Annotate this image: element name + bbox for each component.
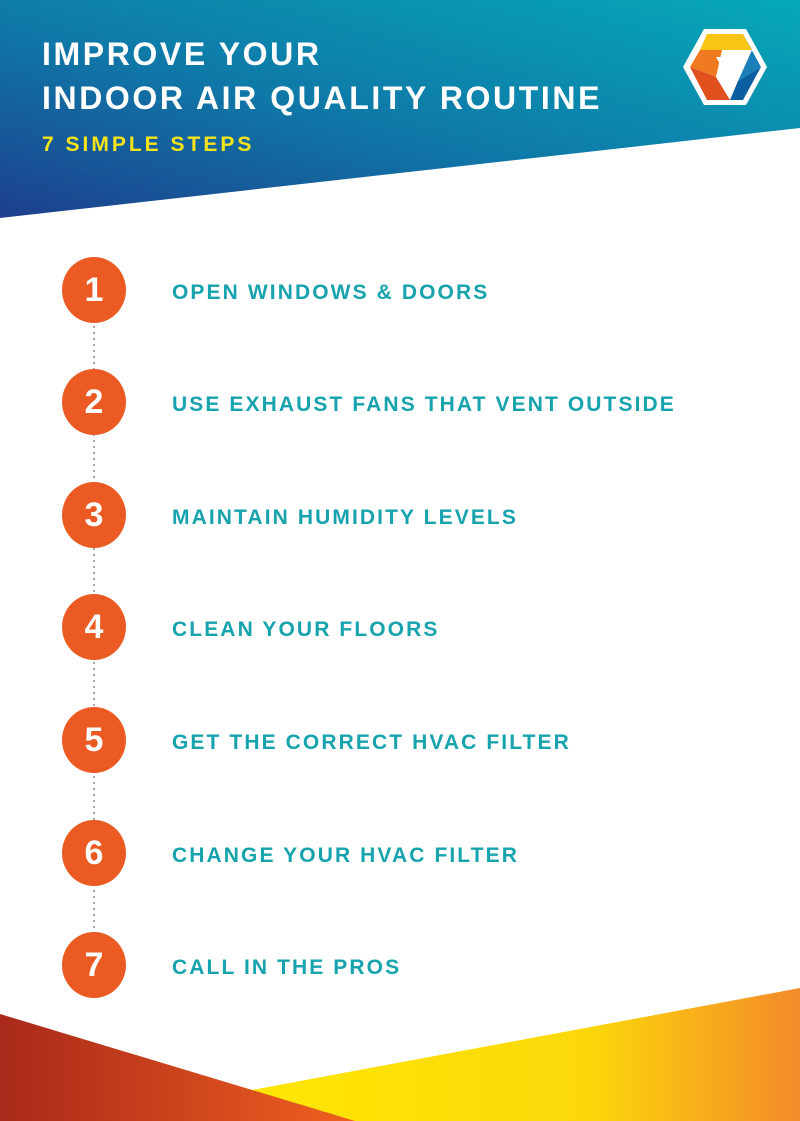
step 6 (62, 820, 519, 886)
step 3: 3 (85, 496, 103, 534)
step 1 (62, 257, 489, 323)
step 4: CLEAN YOUR FLOORS (172, 618, 440, 641)
step 2: 2 (85, 383, 103, 421)
step 6: CHANGE YOUR HVAC FILTER (172, 844, 519, 867)
step 5: GET THE CORRECT HVAC FILTER (172, 731, 571, 754)
title: INDOOR AIR QUALITY ROUTINE (42, 80, 602, 116)
logo (683, 29, 767, 105)
subtitle: 7 SIMPLE STEPS (42, 133, 254, 156)
step 7: 7 (85, 946, 103, 984)
title (42, 36, 602, 116)
step 2: USE EXHAUST FANS THAT VENT OUTSIDE (172, 393, 676, 416)
step 3 (62, 482, 518, 548)
dotted connector (93, 320, 95, 940)
step 5: 5 (85, 721, 103, 759)
title: IMPROVE YOUR (42, 36, 322, 72)
step 4 (62, 594, 440, 660)
step 6: 6 (85, 834, 103, 872)
step 3: MAINTAIN HUMIDITY LEVELS (172, 506, 518, 529)
step 2 (62, 369, 676, 435)
step 7: CALL IN THE PROS (172, 956, 401, 979)
step 1: OPEN WINDOWS & DOORS (172, 281, 489, 304)
step 7 (62, 932, 401, 998)
step 4: 4 (85, 608, 103, 646)
step 1: 1 (85, 271, 103, 309)
step 5 (62, 707, 571, 773)
